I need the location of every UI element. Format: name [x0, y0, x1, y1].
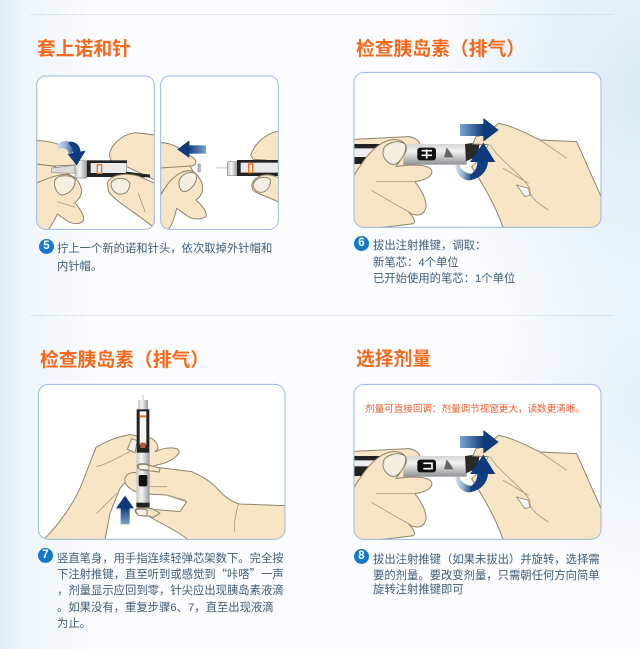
step 7 badge: [38, 548, 53, 563]
callout: dose note: 剂量可直接回调：剂量调节视窗更大，读数更清晰。: [365, 404, 585, 415]
step 8 text: 旋转注射推键即可: [373, 584, 464, 596]
right hand: [472, 435, 603, 540]
step 6 text: [373, 237, 515, 286]
step 5 badge: 5: [43, 240, 50, 252]
step 6 badge: 6: [358, 237, 365, 249]
heading: attach needle: 套上诺和针: [37, 38, 131, 59]
right hand upper finger: [250, 130, 278, 160]
step 7 text: ，剂量显示应回到零，针尖应出现胰岛素液滴: [57, 582, 284, 598]
right hand upper fingers: [109, 133, 155, 180]
step 6 text: 拔出注射推键，调取：: [373, 237, 486, 253]
step 7 text: 为止。: [57, 618, 91, 630]
icon: arrow up: [116, 496, 134, 524]
pen upright: [136, 395, 150, 507]
step 8 badge: [354, 549, 369, 564]
pen with needle: [217, 160, 279, 176]
step 5 text: [57, 240, 272, 273]
step 5 text: 内针帽。: [57, 261, 102, 273]
icon: arrow right: [460, 430, 499, 454]
heading: check insulin bottom: 检查胰岛素（排气）: [40, 345, 209, 372]
step 8 text: [373, 551, 600, 596]
pen cartridge holder: [52, 160, 150, 178]
right thumb: [107, 174, 155, 228]
left hand holding cap: [160, 143, 206, 230]
right thumb: [252, 175, 280, 203]
step 6 text: 已开始使用的笔芯：1个单位: [373, 270, 515, 286]
right hand: [125, 465, 287, 540]
left hand fingers: [353, 452, 432, 540]
right hand fingertips: [135, 464, 160, 517]
panel: check insulin, pull dose button: [353, 72, 603, 228]
step 6 text: 新笔芯：4个单位: [373, 254, 459, 270]
step 7 badge: 7: [42, 549, 49, 561]
left hand fingers: [353, 140, 432, 228]
left hand behind pen: [353, 449, 420, 489]
icon: arrow left: [177, 140, 206, 158]
panel: remove caps: [160, 76, 280, 230]
right hand: [472, 123, 603, 228]
icon: rotate arrow up: [455, 143, 495, 180]
pen body: [353, 454, 480, 477]
pen body: [353, 142, 480, 165]
step 5 badge: [39, 239, 54, 254]
step 8 badge: 8: [358, 550, 365, 562]
panel: attach needle, twist: [36, 76, 155, 230]
step 7 text: 下注射推键，直至听到或感觉到“咔嗒”一声: [57, 566, 284, 582]
left hand: [43, 435, 179, 540]
panel: select dose: [353, 384, 603, 540]
panel: flick pen upright: [38, 384, 287, 540]
step 6 badge: [354, 236, 369, 251]
left hand holding needle: [36, 141, 84, 230]
heading: select dose: 选择剂量: [356, 348, 431, 369]
step 5 text: 拧上一个新的诺和针头，依次取掉外针帽和: [57, 240, 272, 256]
step 7 text: 竖直笔身，用手指连续轻弹芯架数下。完全按: [57, 550, 284, 566]
heading: check insulin top: 检查胰岛素（排气）: [356, 34, 525, 61]
left hand behind pen: [353, 137, 420, 177]
step 8 text: 拔出注射推键（如果未拔出）并旋转，选择需: [373, 551, 600, 567]
icon: arrow right: [460, 118, 499, 142]
icon: rotate arrow up: [455, 455, 495, 492]
icon: twist arrow: [57, 141, 86, 165]
step 7 text: [57, 550, 284, 630]
step 8 text: 要的剂量。要改变剂量，只需朝任何方向简单: [373, 567, 600, 583]
step 7 text: 。如果没有，重复步骤6、7，直至出现液滴: [57, 599, 274, 615]
